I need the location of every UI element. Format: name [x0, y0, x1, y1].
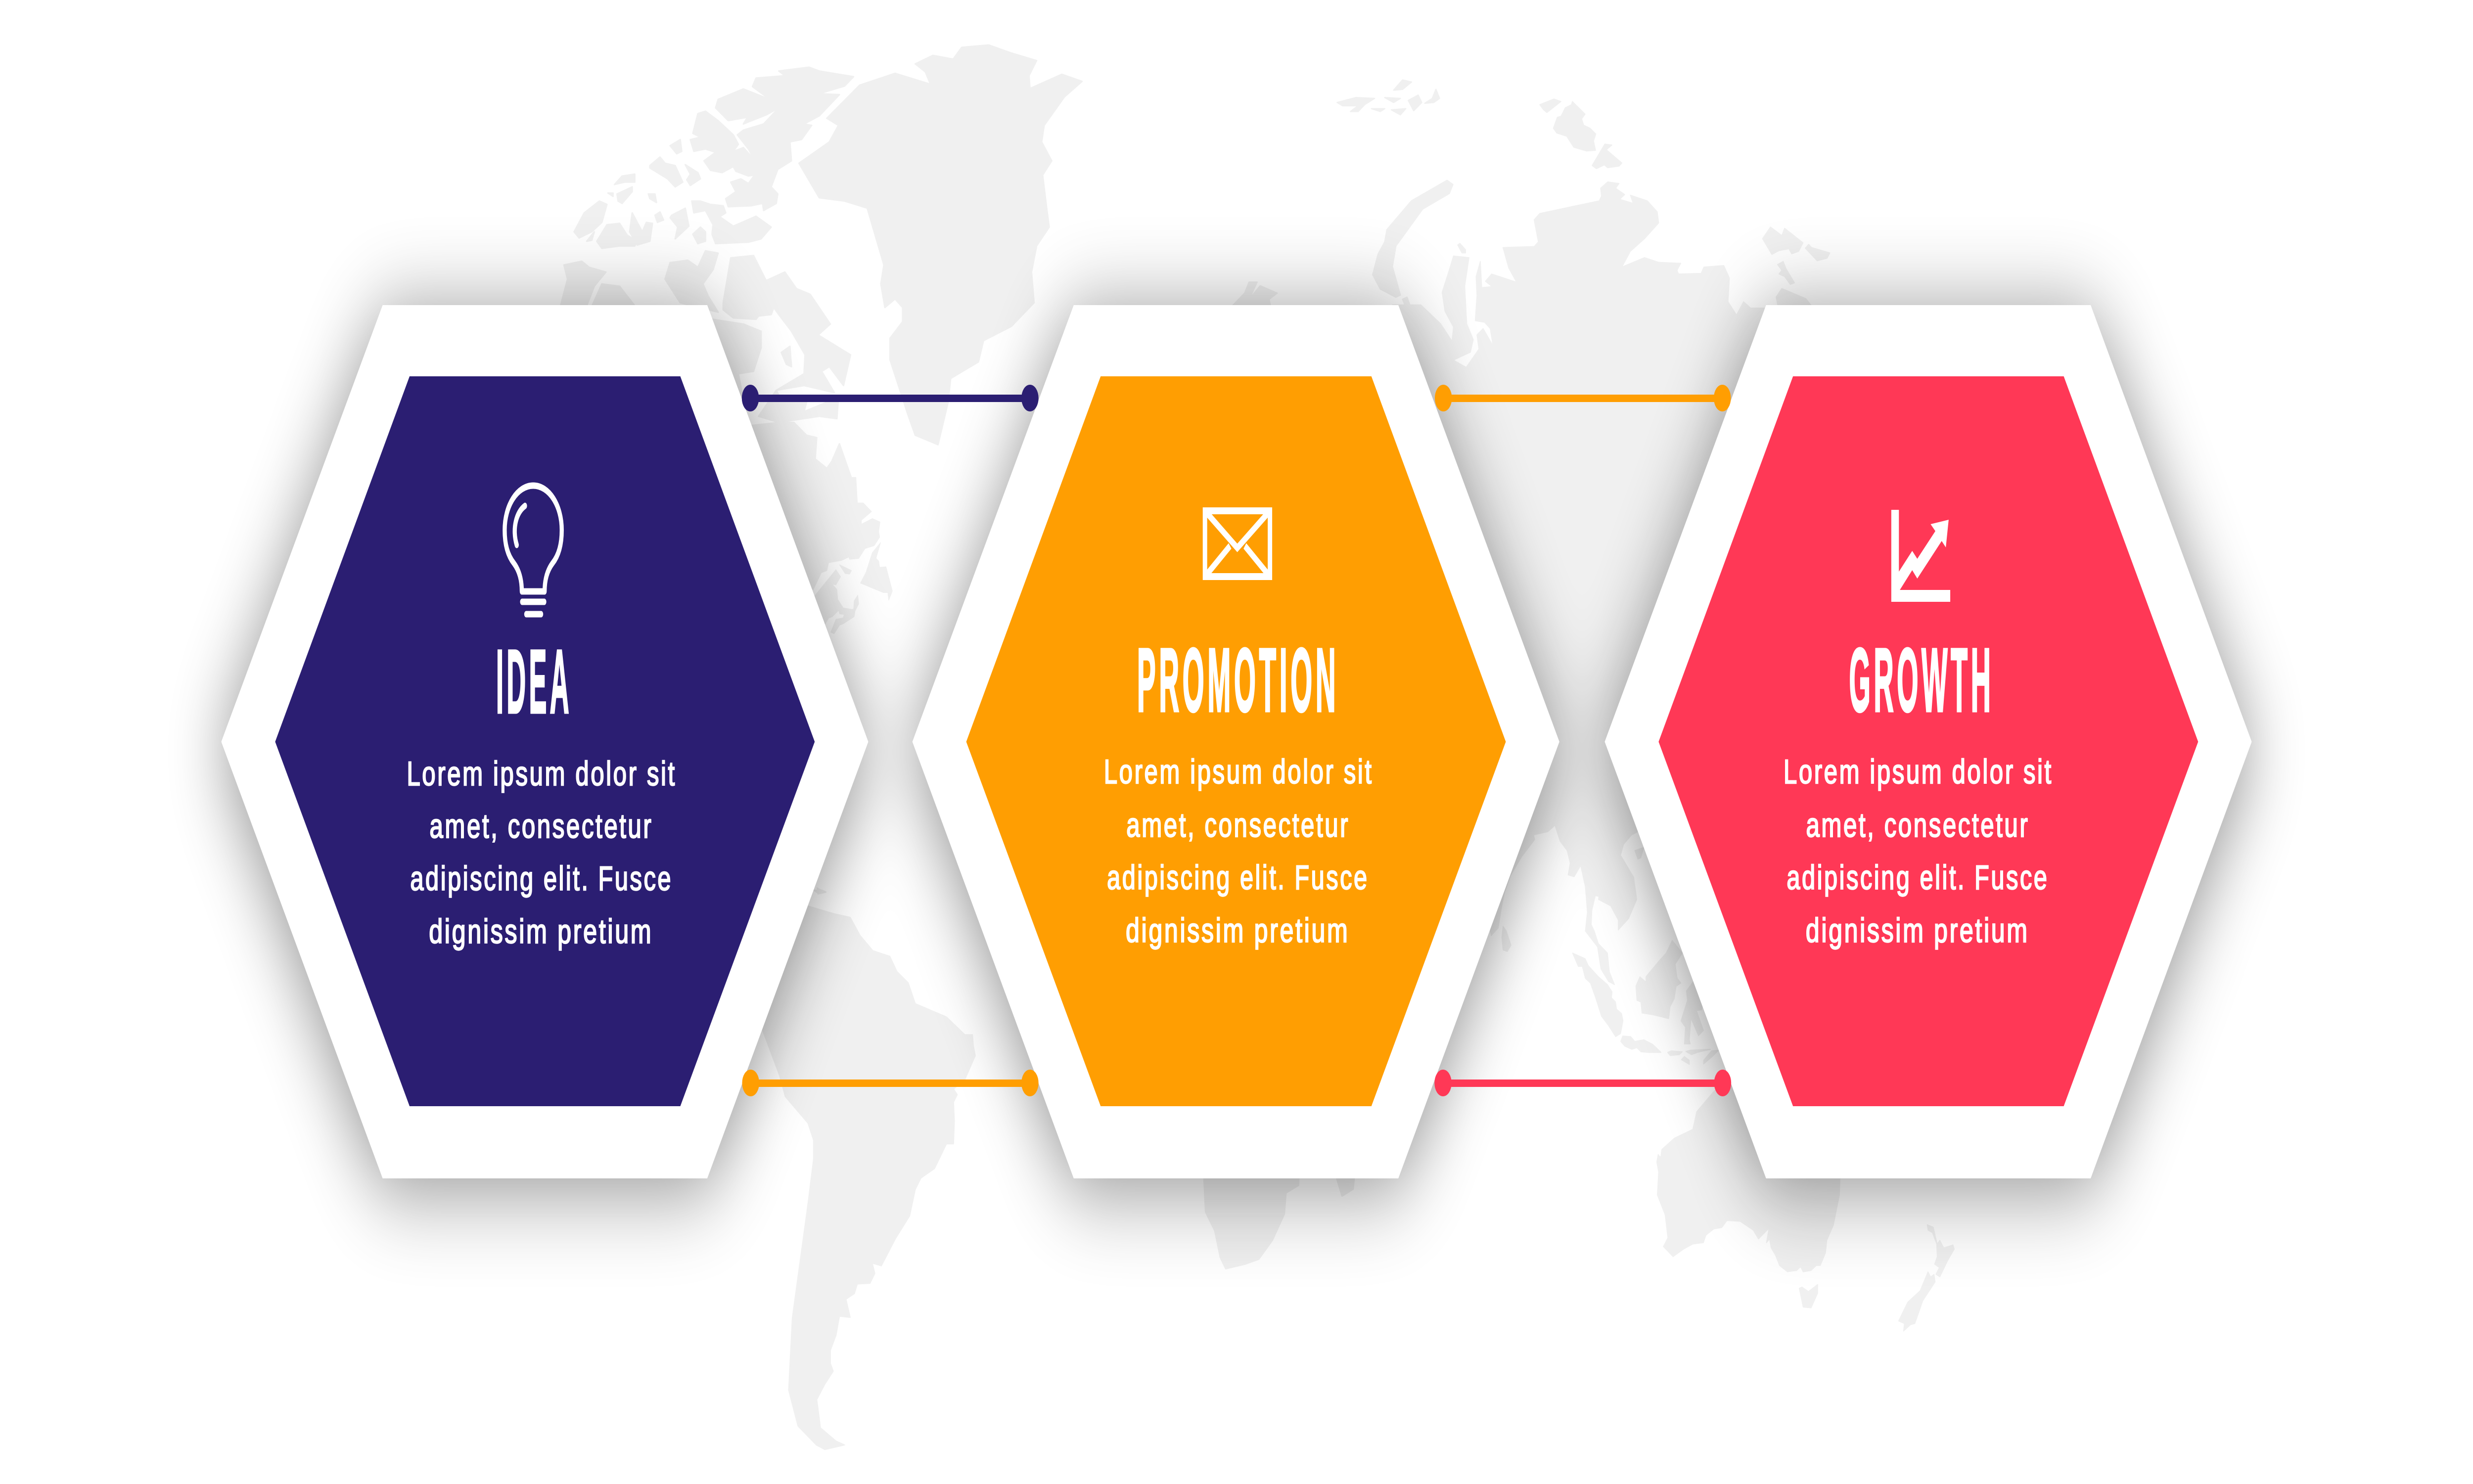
text block: growth description: adipiscing elit. Fusce [1786, 859, 2049, 897]
connector: idea to promotion top [742, 385, 1039, 411]
text block: idea description: adipiscing elit. Fusce [410, 860, 673, 898]
text block: idea description [407, 755, 677, 950]
text block: growth description: amet, consectetur [1806, 807, 2029, 844]
connector: idea to promotion bottom [742, 1070, 1039, 1096]
text block: promotion description [1104, 753, 1374, 949]
panel: promotion hexagon [913, 305, 1559, 1178]
world map background [559, 45, 1954, 1449]
connector: promotion to growth bottom [1434, 1070, 1731, 1096]
panel: idea hexagon [221, 305, 869, 1178]
text block: growth description: dignissim pretium [1806, 912, 2029, 949]
panel: promotion hexagon: PROMOTION [1137, 630, 1339, 730]
text block: growth description [1784, 753, 2053, 949]
text block: promotion description: dignissim pretium [1126, 912, 1349, 949]
connector: promotion to growth top [1435, 385, 1731, 411]
hexagon drop shadows [221, 315, 2252, 1188]
panel: growth hexagon [1604, 305, 2252, 1178]
panel: growth hexagon: GROWTH [1849, 630, 1994, 730]
text block: idea description: dignissim pretium [429, 913, 653, 950]
panel: idea hexagon: IDEA [496, 632, 572, 732]
text block: promotion description: Lorem ipsum dolor sit [1104, 753, 1374, 791]
icon: envelope [1205, 511, 1270, 577]
icon: light bulb [504, 486, 562, 614]
text block: promotion description: adipiscing elit. Fusce [1107, 859, 1369, 897]
text block: promotion description: amet, consectetur [1126, 807, 1350, 844]
text block: idea description: Lorem ipsum dolor sit [407, 755, 677, 793]
text block: idea description: amet, consectetur [429, 808, 653, 845]
text block: growth description: Lorem ipsum dolor sit [1784, 753, 2053, 791]
icon: growth chart [1891, 510, 1950, 602]
